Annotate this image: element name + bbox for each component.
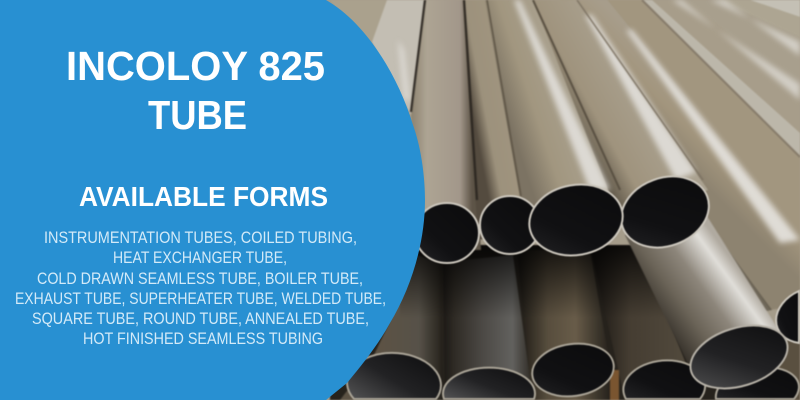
far right tube highlights (672, 0, 800, 100)
title line 2: TUBE (148, 92, 247, 138)
far right tubes (609, 0, 800, 234)
opening: bottom right (716, 367, 799, 399)
list of available forms (15, 228, 386, 348)
title line 1: INCOLOY 825 (66, 43, 325, 89)
tube openings (347, 165, 799, 400)
list of available forms: HEAT EXCHANGER TUBE, (113, 248, 287, 267)
opening: top row first (415, 203, 479, 263)
opening: bottom third (530, 342, 616, 398)
upper left tube bodies (372, 0, 708, 251)
opening: right edge (776, 291, 799, 343)
large foreground tube body (624, 217, 778, 364)
opening: large foreground (688, 324, 790, 390)
list of available forms: SQUARE TUBE, ROUND TUBE, ANNEALED TUBE, (32, 309, 369, 328)
subheading: available forms: AVAILABLE FORMS (79, 181, 328, 212)
list of available forms: EXHAUST TUBE, SUPERHEATER TUBE, WELDED TUBE, (15, 289, 386, 308)
lower dark tube bodies (330, 245, 800, 400)
list of available forms: HOT FINISHED SEAMLESS TUBING (83, 329, 323, 348)
upper seams (411, 0, 703, 200)
opening: bottom second (443, 368, 535, 399)
list of available forms: COLD DRAWN SEAMLESS TUBE, BOILER TUBE, (37, 269, 363, 288)
title (66, 43, 325, 138)
long tube running to the right edge (614, 41, 800, 312)
opening: top row fourth (621, 175, 710, 250)
opening: bottom left (347, 353, 441, 399)
list of available forms: INSTRUMENTATION TUBES, COILED TUBING, (44, 228, 357, 247)
upper left tube highlights (398, 0, 696, 190)
opening: bottom fourth (623, 360, 705, 399)
blue circular panel (0, 0, 425, 400)
opening: top row third (528, 183, 624, 258)
backdrop behind tubes (320, 0, 800, 400)
long tube highlight (626, 30, 800, 243)
opening: top row second (480, 196, 540, 254)
photo: stacked metal tubes (320, 0, 800, 400)
